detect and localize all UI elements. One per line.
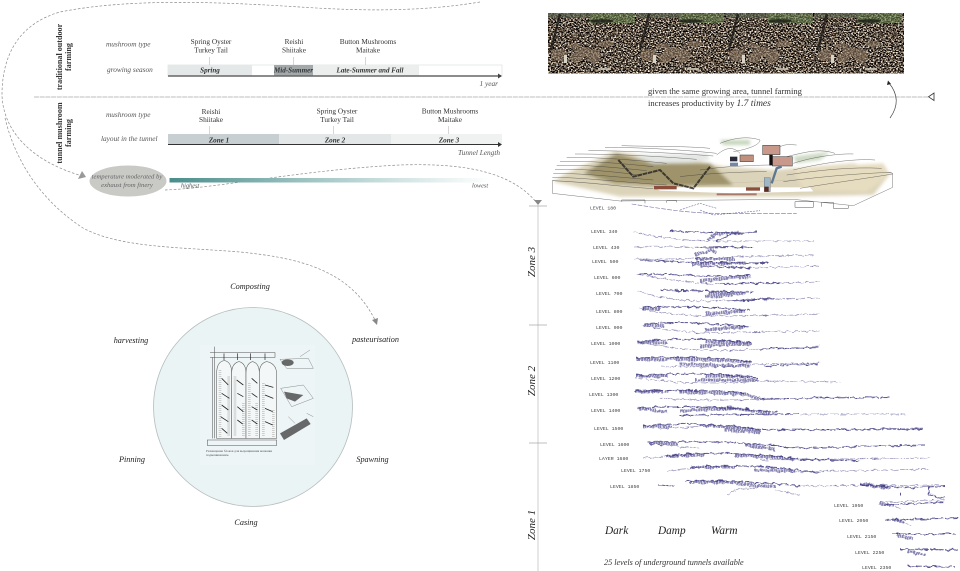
level 2250 [855, 549, 958, 556]
timeline: growing season [107, 57, 502, 88]
row: tunnel mushroom type: Spring Oyster [317, 106, 358, 116]
timeline: layout in the tunnel: Zone 1 [208, 136, 229, 144]
growing cycle circle [154, 308, 352, 506]
callout: temperature ellipse [90, 166, 166, 196]
section heading: traditional outdoor farming: farming [64, 43, 73, 71]
row: traditional mushroom type: mushroom type [106, 40, 151, 48]
row: traditional mushroom type: Turkey Tail [194, 46, 228, 54]
growing cycle stage labels: Composting [230, 282, 270, 291]
growing cycle stage labels: Casing [234, 518, 258, 527]
timeline: layout in the tunnel [101, 126, 502, 157]
level 500 [592, 255, 820, 268]
level 2350: LEVEL 2350 [862, 565, 891, 571]
level 600: LEVEL 600 [594, 275, 620, 281]
row: tunnel mushroom type [106, 106, 478, 124]
temperature gradient bar: highest [181, 182, 199, 190]
row: traditional mushroom type: Reishi [285, 37, 303, 46]
level 340 [591, 229, 814, 241]
level 1950 [834, 500, 945, 509]
tunnel level plans [589, 229, 958, 571]
divider line with end marker [34, 93, 934, 100]
growing cycle stage labels: pasteurisation [351, 335, 399, 344]
row: tunnel mushroom type: mushroom type [106, 110, 151, 119]
section heading: tunnel mushroom farming: tunnel mushroom [55, 102, 64, 164]
mine site block diagram: LEVEL 180 [590, 206, 616, 212]
level 700: LEVEL 700 [596, 291, 622, 297]
level 1100: LEVEL 1100 [590, 360, 619, 366]
environment keywords: Warm [711, 525, 738, 537]
growing cycle stage labels: harvesting [114, 336, 148, 345]
level 430: LEVEL 430 [593, 245, 619, 251]
growing cycle stage labels [114, 282, 399, 527]
zone axis: Zone 1 [526, 510, 538, 540]
row: tunnel mushroom type: Reishi [202, 107, 220, 116]
level 1100 [590, 357, 820, 367]
callout: temperature ellipse: exhaust from finery [101, 182, 153, 189]
level 900 [596, 322, 820, 333]
row: traditional mushroom type: Maitake [356, 46, 380, 54]
level 1600 [600, 442, 925, 449]
level 1500 [594, 424, 923, 432]
illustration caption [206, 449, 272, 457]
levels caption: 25 levels of underground tunnels available [604, 558, 744, 567]
level 1200 [591, 374, 840, 383]
level 430 [593, 245, 753, 255]
mine site block diagram [552, 138, 893, 215]
row: tunnel mushroom type: Turkey Tail [320, 115, 354, 124]
dashed arrow: to growing cycle [5, 118, 378, 325]
row: traditional mushroom type: Shiitake [282, 46, 306, 54]
level 1950: LEVEL 1950 [834, 503, 863, 509]
level 2150 [847, 534, 956, 540]
productivity statement: given the same growing area, tunnel farming [648, 86, 803, 96]
timeline: growing season: 1 year [480, 79, 498, 88]
growing cycle stage labels: Pinning [118, 455, 145, 464]
level 1300: LEVEL 1300 [589, 392, 618, 398]
row: traditional mushroom type: Button Mushrooms [340, 37, 396, 46]
timeline: layout in the tunnel: Zone 3 [438, 136, 460, 144]
level 800: LEVEL 800 [596, 309, 622, 315]
temperature gradient bar [170, 178, 490, 190]
section heading: traditional outdoor farming [55, 23, 73, 90]
row: tunnel mushroom type: Maitake [438, 115, 462, 124]
level 1850 [610, 481, 945, 498]
level 1000: LEVEL 1000 [591, 341, 620, 347]
level 2250: LEVEL 2250 [855, 550, 884, 556]
level 900: LEVEL 900 [596, 325, 622, 331]
zone axis: Zone 3 [526, 246, 538, 277]
level 1850: LEVEL 1850 [610, 484, 639, 490]
callout: temperature ellipse: temperature moderated by [92, 174, 162, 180]
level 500: LEVEL 500 [592, 259, 618, 265]
level 340: LEVEL 340 [591, 229, 617, 235]
environment keywords: Damp [657, 525, 686, 537]
section heading: traditional outdoor farming: traditional outdoor [55, 23, 64, 90]
dashed arrow: ellipse to zone axis [165, 165, 537, 203]
row: traditional mushroom type [106, 37, 396, 54]
level 1300 [589, 390, 890, 400]
row: tunnel mushroom type: Button Mushrooms [422, 106, 478, 116]
layer 1680 [599, 453, 930, 462]
timeline: growing season: Mid-Summer [273, 66, 313, 74]
photo strip: outdoor mushroom bed [548, 13, 904, 74]
level 2050: LEVEL 2050 [839, 518, 868, 524]
level 2050 [839, 518, 958, 525]
curved arrow: productivity up [887, 80, 896, 118]
layer 1680: LAYER 1680 [599, 456, 628, 462]
level 800 [596, 307, 820, 316]
level 700 [596, 290, 820, 301]
dashed arrow: outdoor farming to temperature ellipse [2, 2, 480, 179]
zone axis: Zone 2 [526, 365, 538, 396]
level 1750 [621, 466, 930, 474]
level 1600: LEVEL 1600 [600, 442, 629, 448]
growing cycle stage labels: Spawning [356, 455, 389, 464]
timeline: layout in the tunnel: Zone 2 [324, 136, 346, 144]
zone axis [526, 200, 547, 571]
illustration caption: подвешиванием. [206, 453, 229, 457]
level 1200: LEVEL 1200 [591, 376, 620, 382]
environment keywords: Dark [604, 525, 629, 537]
level 1500: LEVEL 1500 [594, 426, 623, 432]
level 1750: LEVEL 1750 [621, 468, 650, 474]
level 1400 [591, 407, 905, 415]
section heading: tunnel mushroom farming [55, 102, 73, 164]
timeline: layout in the tunnel: layout in the tunnel [101, 134, 158, 143]
section heading: tunnel mushroom farming: farming [64, 119, 73, 147]
level 600 [594, 274, 820, 284]
level 1400: LEVEL 1400 [591, 408, 620, 414]
row: tunnel mushroom type: Shiitake [199, 115, 223, 124]
illustration caption: Размещение блоков для выращивания вешенки [206, 449, 272, 453]
level 2350 [862, 565, 955, 571]
timeline: layout in the tunnel: Tunnel Length [458, 148, 500, 157]
productivity statement: increases productivity by 1.7 times [648, 98, 771, 109]
environment keywords [604, 525, 738, 537]
row: traditional mushroom type: Spring Oyster [191, 37, 232, 46]
timeline: growing season: growing season [107, 65, 153, 74]
hanging bag illustration [207, 347, 313, 445]
timeline: growing season: Late-Summer and Fall [335, 66, 404, 74]
productivity statement [648, 86, 803, 109]
level 2150: LEVEL 2150 [847, 534, 876, 540]
temperature gradient bar: lowest [472, 182, 488, 190]
level 1000 [591, 339, 820, 350]
timeline: growing season: Spring [200, 66, 220, 74]
